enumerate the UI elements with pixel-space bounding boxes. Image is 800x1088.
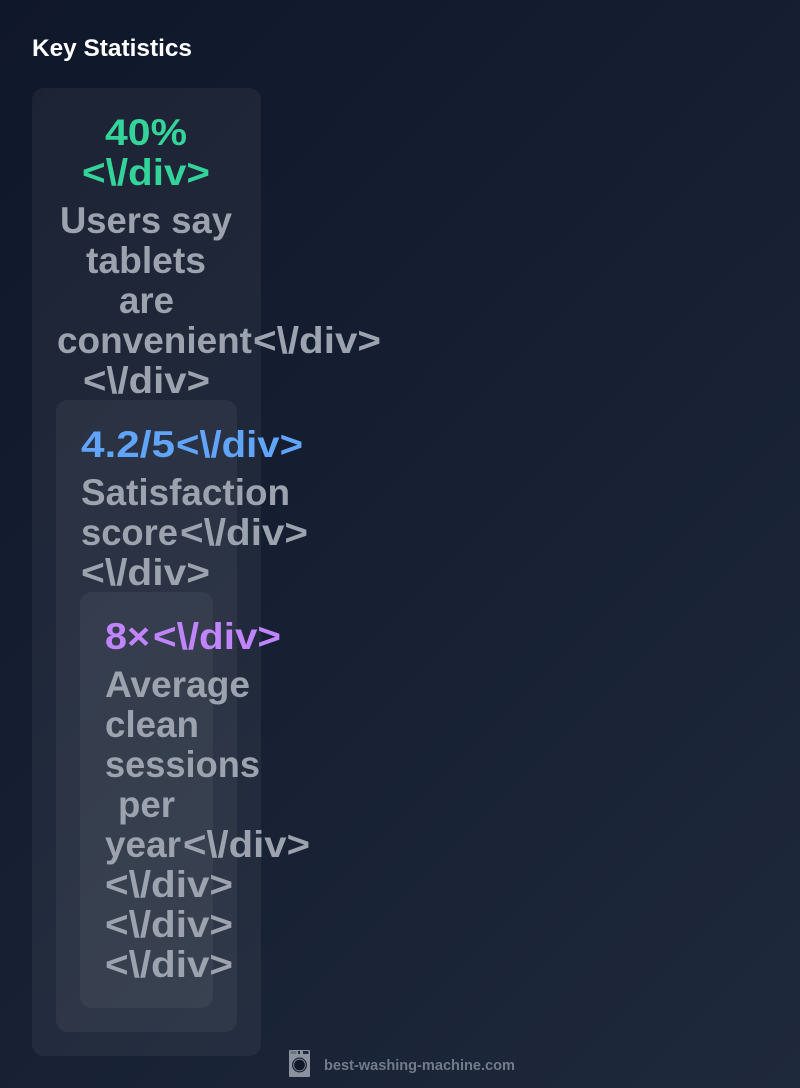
- icon: washing machine: [289, 1050, 310, 1077]
- stat label: satisfaction score: score: [81, 512, 178, 553]
- stat value: 8x: [105, 616, 281, 657]
- stat label: users say tablets are convenient: Users say: [60, 200, 232, 241]
- stat label: users say tablets are convenient: [57, 200, 381, 401]
- stat value: 8x: <\/div>: [153, 616, 281, 657]
- stat value: 40%: 40%: [105, 112, 187, 153]
- stat label: average clean sessions per year: clean: [105, 704, 199, 745]
- stat label: users say tablets are convenient: are: [119, 280, 174, 321]
- stat label: average clean sessions per year: <\/div>: [105, 944, 233, 985]
- stat label: average clean sessions per year: sessions: [105, 744, 260, 785]
- stat label: average clean sessions per year: <\/div>: [105, 904, 233, 945]
- stat value: 4.2/5: <\/div>: [176, 424, 303, 465]
- stat label: average clean sessions per year: year: [105, 824, 181, 865]
- panel: outer stat card: [32, 88, 381, 1056]
- stat label: satisfaction score: [81, 472, 308, 593]
- stat label: users say tablets are convenient: convenient: [57, 320, 252, 361]
- panel: middle stat card: [56, 400, 310, 1032]
- stat value: 8x: 8×: [105, 616, 150, 657]
- title: Key Statistics: [32, 35, 192, 62]
- panel: inner stat card: [80, 592, 310, 1008]
- stat value: 4.2/5: [81, 424, 303, 465]
- stat value: 40%: [82, 112, 210, 193]
- stat label: users say tablets are convenient: tablets: [86, 240, 206, 281]
- stat label: average clean sessions per year: <\/div>: [183, 824, 310, 865]
- stat label: average clean sessions per year: <\/div>: [105, 864, 233, 905]
- stat label: average clean sessions per year: Average: [105, 664, 250, 705]
- stat label: satisfaction score: Satisfaction: [81, 472, 290, 513]
- stat label: average clean sessions per year: per: [118, 784, 175, 825]
- stat label: users say tablets are convenient: <\/div>: [253, 320, 381, 361]
- footer: website: best-washing-machine.com: [324, 1058, 515, 1074]
- stat label: average clean sessions per year: [105, 664, 310, 985]
- stat label: satisfaction score: <\/div>: [180, 512, 308, 553]
- stat value: 40%: <\/div>: [82, 152, 210, 193]
- stat value: 4.2/5: 4.2/5: [81, 424, 175, 465]
- stat label: users say tablets are convenient: <\/div>: [83, 360, 210, 401]
- stat label: satisfaction score: <\/div>: [81, 552, 210, 593]
